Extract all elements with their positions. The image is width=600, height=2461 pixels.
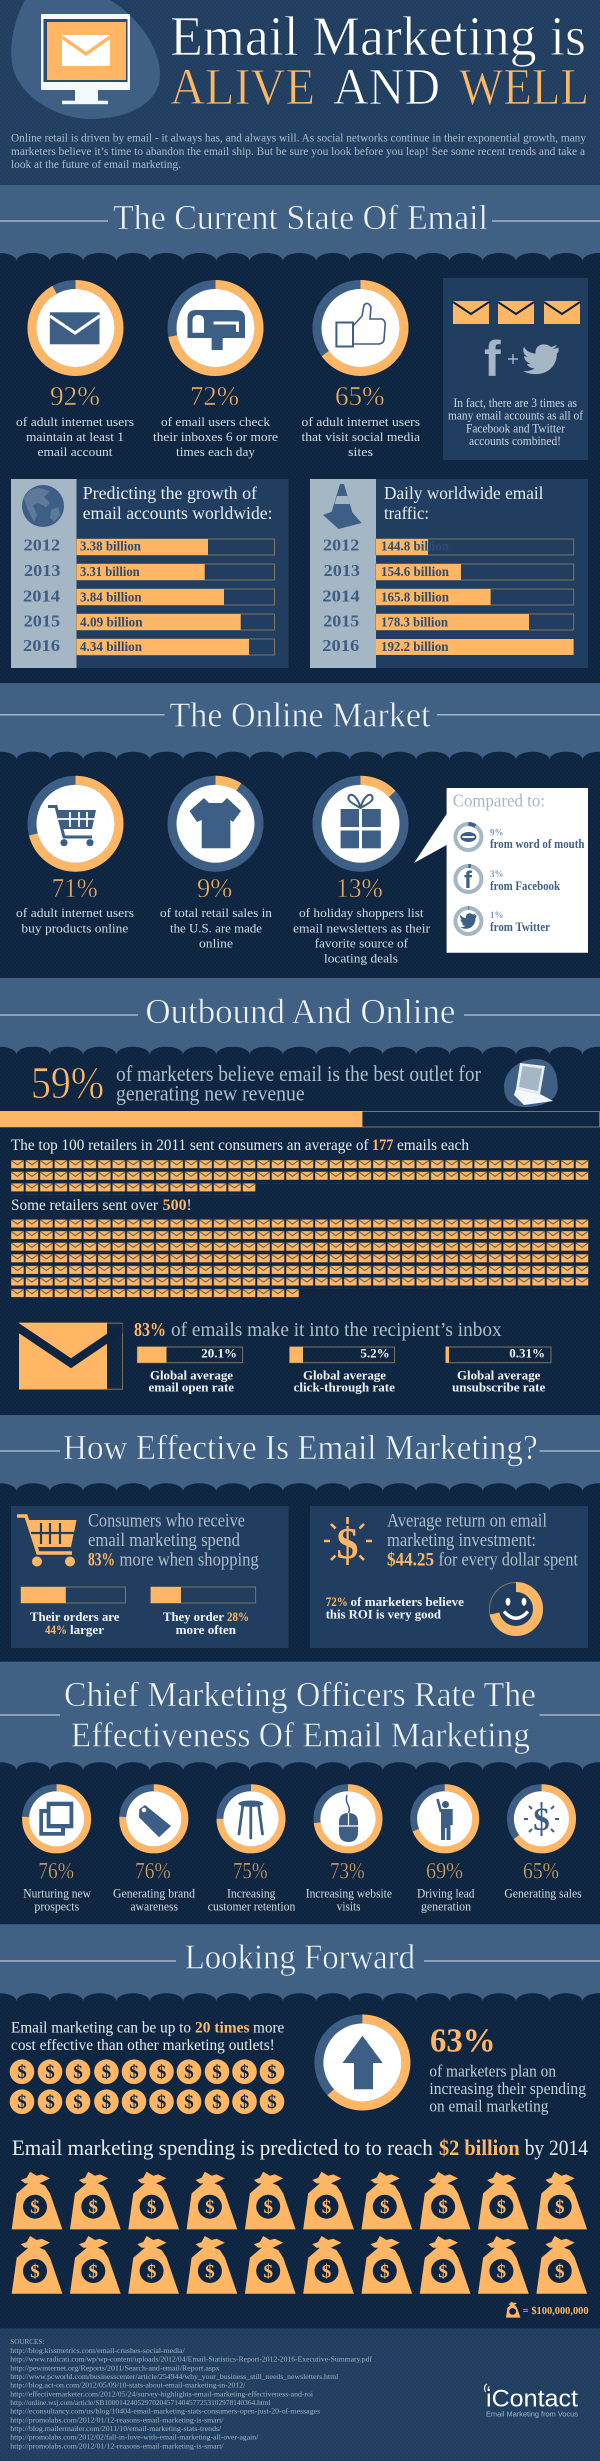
caption: Driving lead [417,1885,475,1900]
title: WELL [459,59,589,116]
pictogram: dollar coins: $ [212,2062,222,2083]
stat: 72% inboxes [153,284,278,459]
bar chart: traffic [322,536,574,655]
caption: their inboxes 6 or more [153,429,278,444]
caption [208,1885,296,1913]
metric: unsubscribe rate: 0.31% [509,1346,545,1361]
pictogram: money bags: $ [89,2197,98,2218]
caption: buy products online [21,921,129,936]
bar chart: accounts: 3.38 billion [80,539,141,554]
stat: 73% website visits [306,1788,392,1913]
pictogram: dollar coins [10,2059,284,2114]
icon: thumbs up [336,303,385,346]
sources list: http://promolabs.com/2012/01/12-reasons-email-marketing-is-smart/ [10,2441,224,2450]
stat: 69% lead generation [414,1788,476,1913]
panel text: 83% [88,1550,115,1571]
panel text [88,1511,259,1571]
bar: orders 44% larger: 44% [45,1622,67,1637]
title: AND [333,59,440,116]
text: 72% of marketers [326,1594,464,1622]
ring chart 92% [32,284,119,372]
stat: 92% email account [16,284,134,459]
stat: 76% nurturing: 76% [38,1858,74,1883]
pictogram: dollar coins: $ [157,2092,166,2113]
caption [113,1885,195,1913]
pictogram: dollar coins: $ [212,2092,222,2113]
icon: big envelope 83% [19,1323,122,1389]
panel heading: traffic: [384,503,429,523]
progress bar 59% [0,1111,600,1127]
caption: email account [38,444,113,459]
ring chart 63% with up arrow [319,2019,406,2106]
sources list: http://pewinternet.org/Reports/2011/Search-and-email/Report.aspx [10,2363,220,2372]
metric: unsubscribe rate [446,1346,551,1395]
pictogram: money bags: $ [205,2197,215,2218]
panel heading: Daily worldwide email [384,483,544,503]
stat: 65% sales [504,1788,582,1900]
heading: Chief Marketing Officers [0,1675,600,1755]
comparison: twitter: from Twitter [490,920,550,934]
caption [306,1885,392,1913]
icon: person raising hand [438,1799,453,1840]
caption: sites [348,444,373,459]
pictogram: dollar coins: $ [129,2062,139,2083]
bar: orders 44% larger: larger [70,1622,104,1637]
footer band [0,2328,600,2461]
sources list: http://econsultancy.com/us/blog/10404-email-marketing-stats-consumers-open-just-20-of-messages [10,2407,320,2416]
value: 92% [50,381,100,411]
text: spending predicted to reach $2 billion: by 2014 [525,2135,588,2160]
text: some retailers sent over 500: 500 [163,1197,187,1214]
bar chart: traffic: 2015 [323,612,359,631]
icon: gift [341,795,381,848]
pictogram: money bags: $ [438,2197,448,2218]
metric: open rate: Global average [150,1367,233,1382]
icon: overlapping frames [39,1802,73,1836]
caption: of adult internet users [16,905,134,920]
pictogram: dollar coins: $ [240,2092,249,2113]
icon: dollar sign with rays: $ [336,1519,358,1568]
pictogram: money bags: $ [147,2197,156,2218]
sources list: http://online.wsj.com/article/SB10001424052970204571404577253102978140364.html [10,2398,271,2407]
pictogram: dollar coins: $ [157,2062,166,2083]
sources list: http://blog.act-on.com/2012/05/09/10-stats-about-email-marketing-in-2012/ [10,2381,246,2390]
metric: click-through rate: 5.2% [360,1346,390,1361]
stat: 13% newsletters [293,780,431,966]
caption: that visit social media [302,429,420,444]
ring chart 65% [317,284,404,372]
pictogram: dollar coins: $ [102,2092,111,2113]
text: top 100 retailers: emails each [397,1137,469,1154]
metric: open rate: email open rate [148,1380,234,1395]
caption: Increasing website [306,1885,392,1900]
sources list: SOURCES: [10,2337,44,2346]
sources list: http://effectivemarketer.com/2012/05/24/survey-highlights-email-marketing-effectiveness-and-roi [10,2389,313,2398]
stat: 63% of marketers: of marketers plan on [429,2062,556,2081]
title: Email Marketing is [170,6,586,68]
heading: Looking Forward: Looking Forward [185,1937,415,1976]
pictogram: money bags [12,2172,587,2294]
ring chart 69% [414,1788,476,1850]
metric: open rate [137,1346,243,1395]
ring chart 65% [510,1788,572,1850]
icon: monitor with envelope on blob [11,0,160,119]
stat: 69% lead generation: 69% [426,1858,463,1883]
bar chart: traffic: 2012 [323,536,359,555]
panel heading [384,483,544,523]
heading: Chief Marketing Officers: Chief Marketing Officers Rate The [64,1675,536,1714]
pictogram: money bags: $ [497,2197,506,2218]
caption: customer retention [208,1898,296,1913]
sources list: http://promolabs.com/2012/02/fall-in-love-with-email-marketing-all-over-again/ [10,2433,259,2442]
bar chart: accounts: 2016 [23,636,60,655]
heading: The Online Market: The Online Market [170,696,431,735]
ring chart 13% [317,780,404,867]
pictogram: money bags: $ [30,2197,40,2218]
heading: Chief Marketing Officers: Effectiveness Of Email Marketing [71,1716,530,1755]
bar chart: accounts: 3.31 billion [80,564,140,579]
logo: iContact: iContact [486,2386,578,2413]
pictogram: money bags: $ [322,2261,331,2282]
icon: stool [238,1800,263,1838]
title: ALIVE [170,59,315,116]
callout heading: Compared to: [453,791,545,811]
ring chart 75% [220,1788,282,1850]
text: 20 times more cost effective: cost effective than other marketing outlets! [11,2037,275,2054]
pictogram: dollar coins: $ [267,2062,277,2083]
pictogram: dollar coins: $ [102,2062,111,2083]
value: 71% [52,873,98,903]
bar chart: traffic: 144.8 billion [381,539,449,554]
panel text: more when shopping [120,1550,259,1571]
sources list: http://www.pcworld.com/businesscenter/article/254944/why_your_business_still_needs_newsletters.html [10,2372,338,2381]
text: 20 times more cost effective: 20 times [195,2020,250,2037]
metric: unsubscribe rate: unsubscribe rate [452,1380,546,1395]
pictogram: dollar coins: $ [129,2092,139,2113]
stat: 75% retention [208,1788,296,1913]
caption: the U.S. are made [170,921,262,936]
pictogram: dollar coins: $ [73,2062,83,2083]
icon: tag [139,1805,171,1837]
bar chart: accounts: 4.34 billion [80,639,142,654]
caption: Generating sales [504,1885,582,1900]
bar chart: accounts: 2013 [24,561,60,580]
heading: The Current State Of Email: The Current State Of Email [113,198,488,237]
bar: orders 44% larger [21,1587,126,1637]
caption: online [199,936,233,951]
icon: traffic cone [323,484,362,529]
panel text: email marketing spend [88,1530,240,1551]
pictogram: dollar coins: $ [73,2092,83,2113]
text: 72% of marketers: 72% [326,1594,348,1609]
caption: favorite source of [315,936,409,951]
ring chart 9% [172,780,259,867]
comparison: facebook [455,866,560,894]
bar chart: accounts: 4.09 billion [80,615,143,630]
comparison: word of mouth: from word of mouth [490,837,584,851]
legend: one bag equals $100,000,000: = $100,000,000 [523,2305,589,2317]
value: 13% [336,873,383,903]
panel: growth of email accounts [11,479,288,668]
panel text: marketing investment: [387,1530,536,1551]
stat: 76% brand awareness [113,1788,195,1913]
pictogram: money bags: $ [555,2261,564,2282]
comparison: facebook: 3% [490,869,504,879]
panel text: Average return on email [387,1511,547,1532]
stat: 76% brand awareness: 76% [135,1858,171,1883]
panel text: In fact, there are 3 times as [454,396,577,410]
bar chart: traffic: 2013 [324,561,360,580]
sources list: http://www.radicati.com/wp/wp-content/uploads/2012/04/Email-Statistics-Report-2012-2016-Executive-Summary.pdf [10,2355,373,2364]
bar chart: traffic: 2014 [322,586,360,605]
bar: order 28% more often: They order [163,1609,224,1624]
heading: How Effective Is Email Marketing?: How Effective Is Email Marketing? [63,1428,538,1467]
text: top 100 retailers: The top 100 retailers in 2011 sent consumers an average of [11,1137,369,1154]
sources list: http://promolabs.com/2012/01/12-reasons-email-marketing-is-smart/ [10,2415,224,2424]
bar chart: traffic: 165.8 billion [381,589,449,604]
pictogram: dollar coins: $ [45,2092,55,2113]
pictogram: 177 emails [11,1160,590,1195]
pictogram: money bags: $ [205,2261,215,2282]
caption [293,905,431,966]
pictogram: money bags: $ [555,2197,564,2218]
comparison: twitter [455,908,550,934]
section band: looking forward [0,1924,600,2005]
caption: locating deals [324,951,398,966]
value: 72% [190,381,239,411]
comparison: twitter: 1% [490,910,504,920]
bar: order 28% more often: more often [176,1622,237,1637]
caption [23,1885,92,1913]
panel text [387,1511,579,1571]
metric: click-through rate: Global average [303,1367,386,1382]
caption [16,905,134,936]
panel: daily email traffic [310,479,588,668]
caption: Nurturing new [23,1885,92,1900]
section band: outbound [0,978,600,1059]
caption: of adult internet users [302,414,420,429]
ring chart 76% [26,1788,88,1850]
section band: chief marketing officers [0,1662,600,1774]
icon: shopping cart [17,1516,76,1566]
pictogram: dollar coins: $ [240,2062,249,2083]
panel text: accounts combined! [469,434,561,448]
caption: of email users check [161,414,271,429]
callout: compared to [414,788,588,953]
caption: email newsletters as their [293,921,431,936]
bar chart: accounts: 2015 [24,612,60,631]
panel: 3 times as many email accounts [443,278,588,460]
icon: facebook plus twitter [484,331,559,387]
icon: mailbox [188,310,245,350]
ring chart 73% [317,1788,379,1850]
caption: of total retail sales in [160,905,273,920]
value: 9% [197,873,232,903]
comparison: word of mouth [455,824,584,851]
text: spending predicted to reach $2 billion: $2 billion [439,2135,520,2160]
text: some retailers sent over 500: ! [186,1197,192,1214]
stat: 75% retention: 75% [233,1858,268,1883]
stat: 65% sales: 65% [523,1858,559,1883]
panel heading: Predicting the growth of [83,483,257,503]
bar chart: accounts [23,536,274,655]
text: 20 times more cost effective: Email marketing can be up to [11,2020,191,2037]
bar chart: traffic: 2016 [322,636,359,655]
title [170,6,589,116]
bar: order 28% more often [151,1587,256,1637]
pictogram: money bags: $ [263,2261,273,2282]
logo: iContact: Email Marketing from Vocus [486,2410,578,2419]
pictogram: dollar coins: $ [184,2092,194,2113]
stat: 71% buy online [16,780,134,936]
caption [153,414,278,459]
metric: unsubscribe rate: Global average [457,1367,541,1382]
bar chart: accounts: 2014 [23,586,61,605]
text: spending predicted to reach $2 billion: Email marketing spending is predicted to to reach [12,2135,433,2160]
stat: 65% social [302,284,420,459]
panel heading [83,483,272,523]
ring chart 76% [123,1788,185,1850]
pictogram: dollar coins: $ [17,2062,27,2083]
intro text: marketers believe it’s time to abandon the email ship. But be sure you look before you leap! See some recent trends and take a [11,144,586,158]
section band: how effective [0,1415,600,1495]
icon: three envelopes [453,301,580,324]
metric: open rate: 20.1% [201,1346,237,1361]
panel: consumers spend more [11,1506,288,1648]
icon: mouse [339,1795,358,1842]
caption: of holiday shoppers list [299,905,424,920]
pictogram: money bags: $ [322,2197,331,2218]
pictogram: dollar coins: $ [267,2092,277,2113]
value: 65% [335,381,385,411]
pictogram: money bags: $ [147,2261,156,2282]
text: some retailers sent over 500: Some retailers sent over [11,1197,159,1214]
bar: orders 44% larger: Their orders are [30,1609,120,1624]
sources list: http://blog.kissmetrics.com/email-crushes-social-media/ [10,2346,186,2355]
panel text: Facebook and Twitter [466,422,566,436]
caption: Generating brand [113,1885,195,1900]
stat: 59% of marketers: 59% [31,1057,104,1108]
pictogram: money bags: $ [380,2261,390,2282]
bar chart: traffic: 154.6 billion [381,564,449,579]
icon: dollar sign with rays [324,1517,372,1568]
pictogram: money bags: $ [30,2261,40,2282]
ring chart 71% [32,780,119,867]
comparison: facebook: f [464,867,473,894]
stat: 63% of marketers: increasing their spending [429,2079,586,2098]
pictogram: money bags: $ [438,2261,448,2282]
stat: 59% of marketers: of marketers believe email is the best outlet for [116,1061,482,1086]
caption [417,1885,475,1913]
caption: prospects [34,1898,79,1913]
stat: 63% of marketers: on email marketing [429,2097,549,2116]
intro text: look at the future of email marketing. [11,157,181,171]
panel text: $44.25 [387,1550,434,1571]
icon: facebook plus twitter: f [484,331,501,387]
comparison: word of mouth: 9% [490,828,504,838]
legend: one bag equals $100,000,000 [506,2302,589,2318]
stat: 76% nurturing [23,1788,92,1913]
sources list: http://blog.mailermailer.com/2011/10/email-marketing-stats-trends/ [10,2424,222,2433]
pictogram: 500 emails [11,1219,590,1300]
icon: t-shirt [190,798,241,848]
icon: envelope [50,312,100,344]
stat: 63% of marketers: 63% [430,2023,496,2060]
comparison: facebook: from Facebook [490,879,560,893]
bar chart: accounts: 3.84 billion [80,589,142,604]
panel heading: email accounts worldwide: [83,503,272,523]
heading: Outbound And Online: Outbound And Online [145,992,455,1031]
icon: laptop on blob [504,1059,558,1107]
stat: 59% of marketers [31,1057,482,1108]
stat: 73% website visits: 73% [330,1858,365,1883]
caption: Increasing [227,1885,276,1900]
panel text [448,396,584,448]
section band: current state [0,185,600,265]
metric: click-through rate [290,1346,395,1395]
caption: awareness [130,1898,178,1913]
text: 83% of emails reach inbox: 83% [134,1319,166,1341]
bar chart: accounts: 2012 [24,536,60,555]
stat: 9% retail sales [160,780,273,951]
caption [160,905,273,951]
caption: visits [337,1898,360,1913]
metric: click-through rate: click-through rate [294,1380,395,1395]
caption: maintain at least 1 [26,429,124,444]
bar: order 28% more often: 28% [227,1609,249,1624]
text: 20 times more cost effective: more [253,2020,284,2037]
icon: shopping cart [48,806,96,846]
ring chart with smiley 72% [490,1582,542,1636]
pictogram: money bags: $ [380,2197,390,2218]
panel: return on investment [310,1506,588,1648]
icon: globe [22,485,64,527]
caption: generation [421,1898,471,1913]
caption [302,414,420,459]
caption: times each day [176,444,256,459]
icon: dollar with rays: $ [533,1802,550,1838]
panel text: many email accounts as all of [448,408,584,422]
text: top 100 retailers: 177 [372,1137,394,1154]
stat: 63% of marketers [429,2023,586,2116]
pictogram: dollar coins: $ [184,2062,194,2083]
header band [0,0,600,185]
panel text: for every dollar spent [438,1550,579,1571]
panel text: Consumers who receive [88,1511,245,1532]
sources list [10,2337,373,2450]
bar chart: traffic: 192.2 billion [381,639,449,654]
pictogram: dollar coins: $ [45,2062,55,2083]
section band: online market [0,683,600,764]
pictogram: dollar coins: $ [17,2092,27,2113]
text: 72% of marketers: this ROI is very good [326,1607,442,1622]
bar chart: traffic: 178.3 billion [381,615,448,630]
pictogram: money bags: $ [263,2197,273,2218]
text: 83% of emails reach inbox: of emails make it into the recipient’s inbox [171,1319,502,1341]
pictogram: money bags: $ [89,2261,98,2282]
caption: of adult internet users [16,414,134,429]
text: 72% of marketers: of marketers believe [350,1594,464,1609]
text: 20 times more cost effective [11,2020,284,2054]
intro text [11,131,586,171]
ring chart 72% [172,284,259,372]
pictogram: money bags: $ [497,2261,506,2282]
caption [16,414,134,459]
stat: 59% of marketers: generating new revenue [116,1081,305,1106]
